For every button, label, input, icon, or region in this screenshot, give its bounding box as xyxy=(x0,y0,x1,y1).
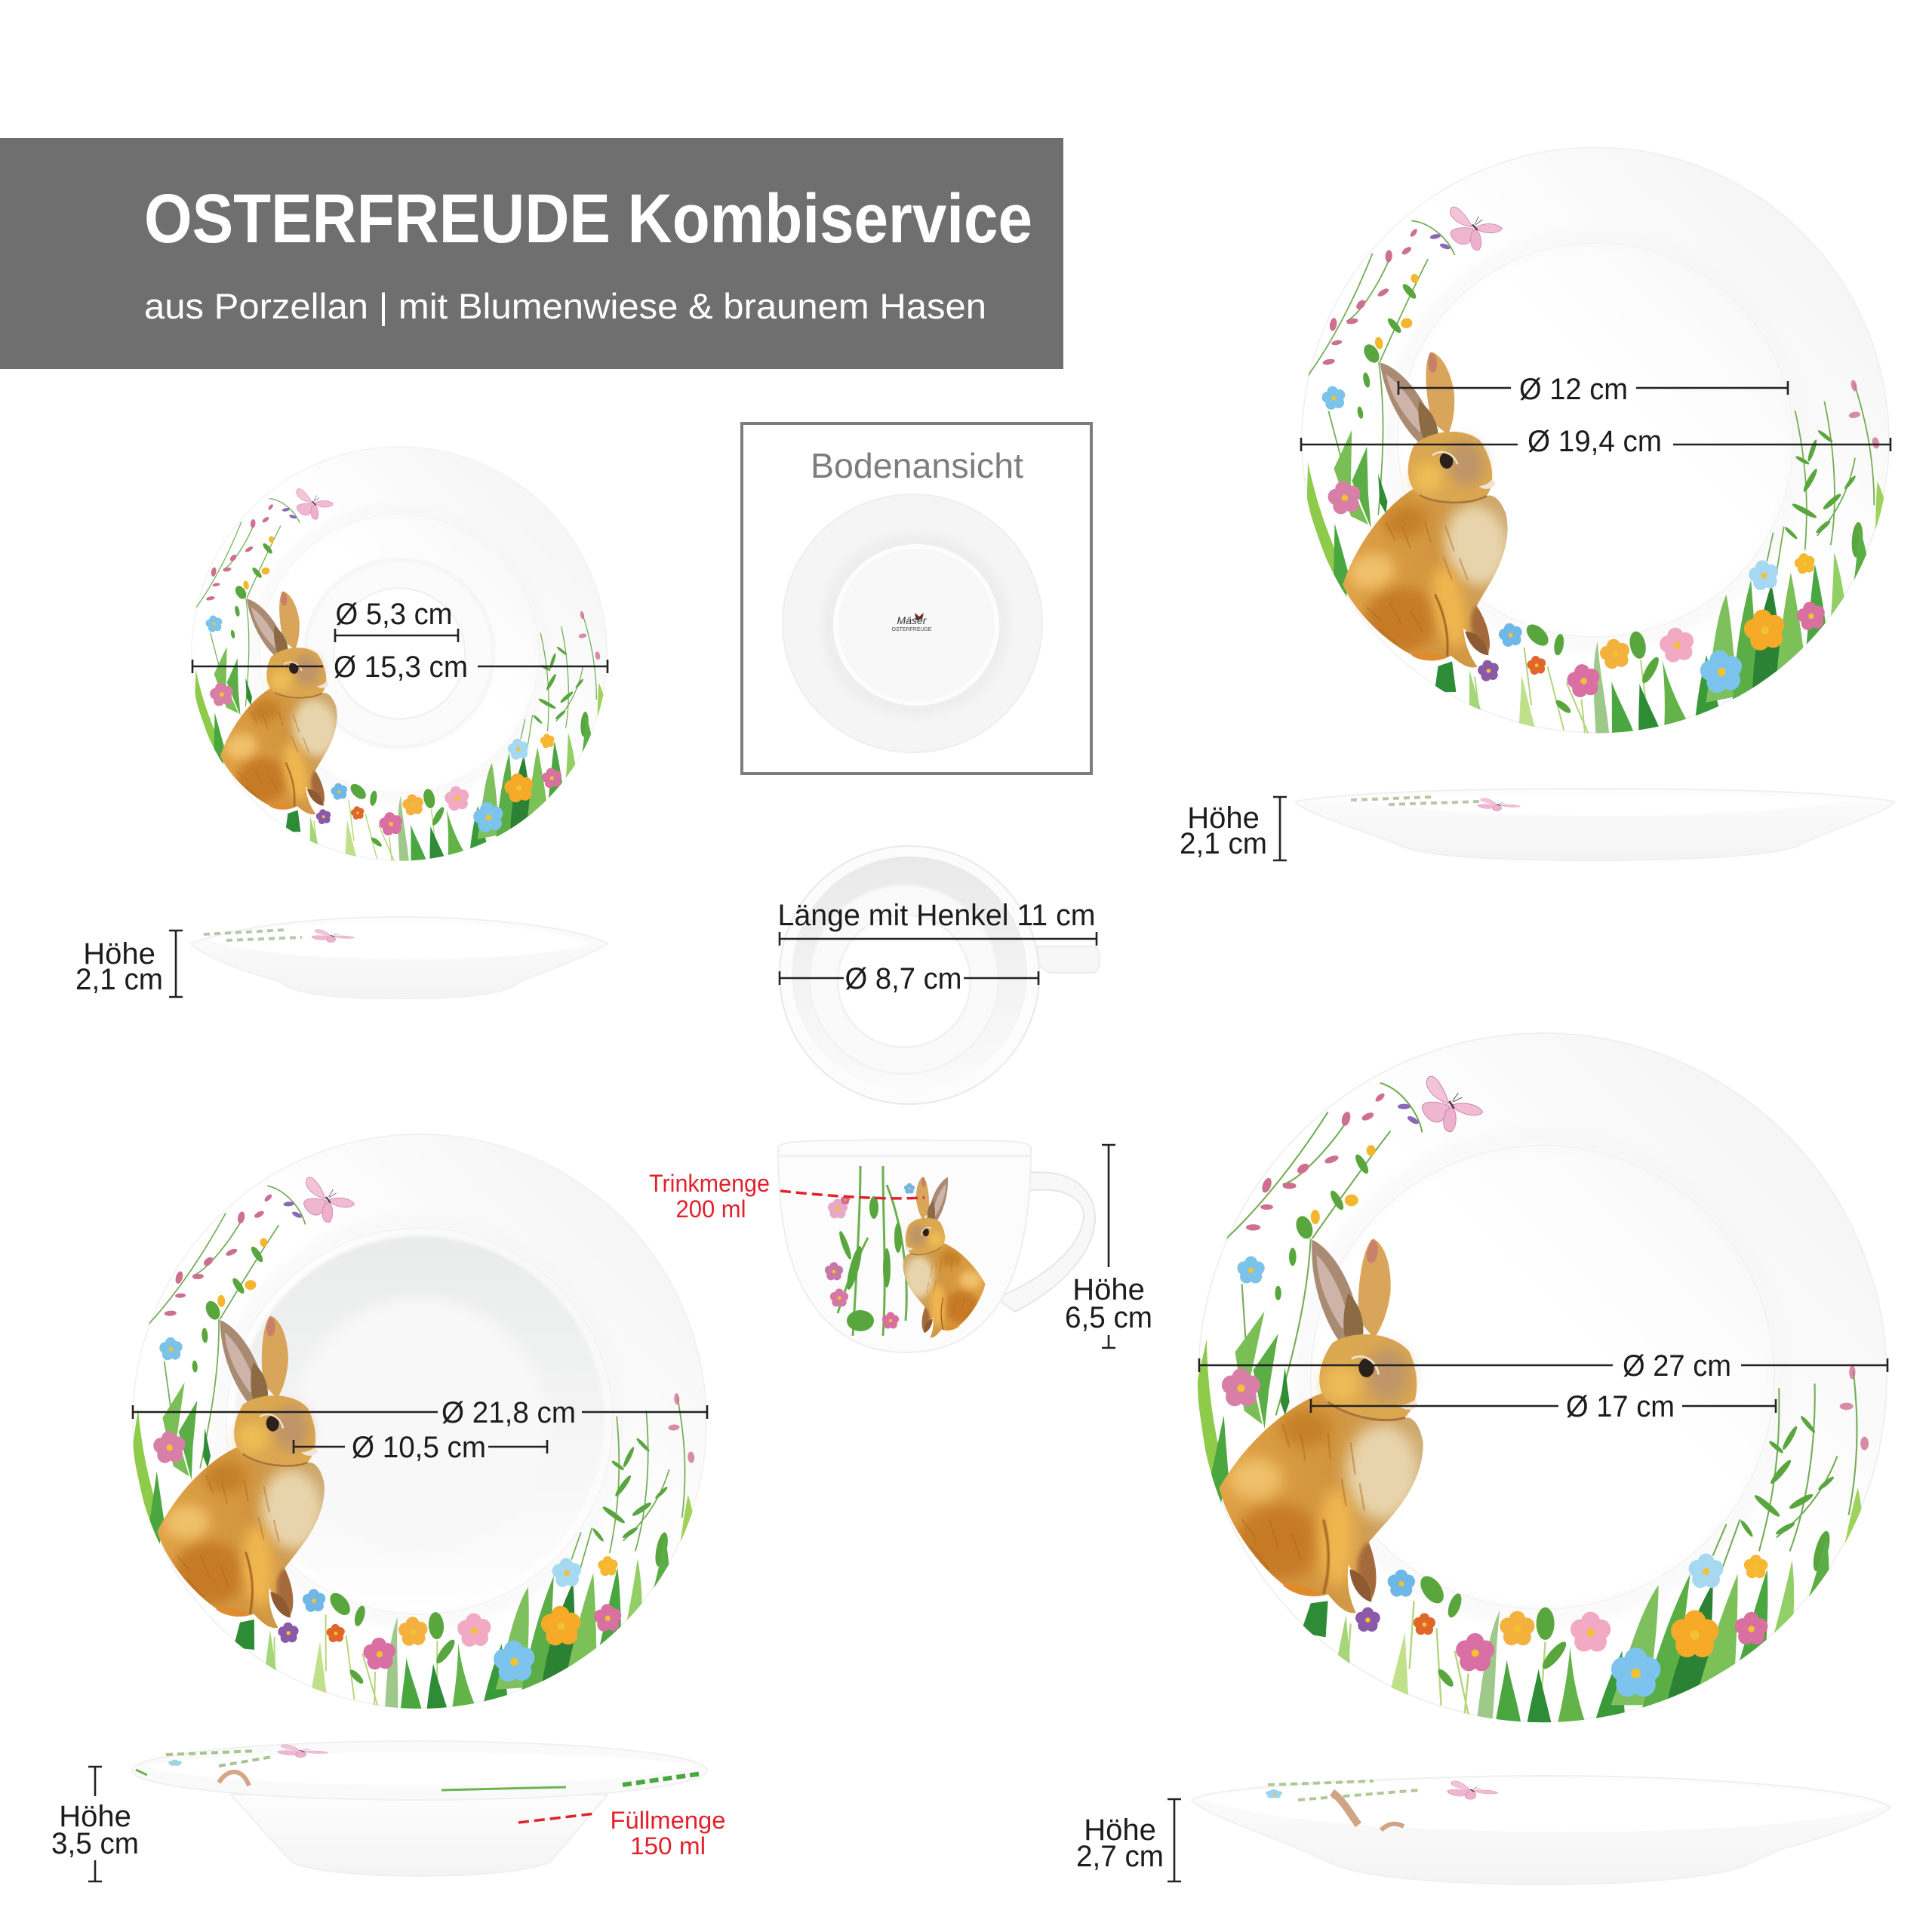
dimension: large plate 27 cm: Ø 27 cm xyxy=(1623,1349,1731,1383)
dimension: large plate height xyxy=(1076,1799,1181,1881)
cup top view xyxy=(780,846,1100,1104)
panel: large dinner plate top view xyxy=(1197,1033,1887,1737)
maker's mark: Mäser xyxy=(897,614,928,626)
dimension: large plate height: 2,7 cm xyxy=(1076,1840,1164,1873)
maker's mark xyxy=(892,613,932,632)
dimension: large plate 17 cm xyxy=(1311,1390,1776,1423)
title banner xyxy=(0,138,1063,369)
dimension: cup length with handle: Länge mit Henkel 11 cm xyxy=(777,899,1096,932)
box heading: Bodenansicht xyxy=(811,446,1023,485)
red fill line: soup plate: 150 ml xyxy=(630,1832,706,1860)
dimension: saucer 15,3 cm xyxy=(192,651,608,684)
dimension: soup plate 21,8 cm xyxy=(133,1396,707,1429)
cup rabbit xyxy=(903,1177,985,1337)
cup flowers xyxy=(825,1166,915,1336)
dimension: cup height xyxy=(1065,1145,1152,1348)
dimension: cup diameter: Ø 8,7 cm xyxy=(845,962,961,995)
title: OSTERFREUDE Kombiservice xyxy=(144,180,1032,257)
maker's mark: OSTERFREUDE xyxy=(892,627,932,632)
dimension: soup plate 10,5 cm: Ø 10,5 cm xyxy=(352,1431,486,1464)
dimension: cup height: 6,5 cm xyxy=(1065,1301,1152,1334)
dimension: cup height: Höhe xyxy=(1072,1273,1145,1306)
large plate side view xyxy=(1192,1776,1890,1884)
cup handle xyxy=(996,1172,1095,1312)
dimension: dinner plate 12 cm xyxy=(1398,373,1788,406)
red fill line: cup: 200 ml xyxy=(676,1195,746,1223)
saucer side view xyxy=(191,917,608,998)
dimension: saucer height xyxy=(75,931,183,997)
dimension: soup plate height: 3,5 cm xyxy=(51,1827,139,1860)
dimension: dinner plate 19,4 cm xyxy=(1301,425,1890,458)
dimension: soup plate height: Höhe xyxy=(59,1800,131,1833)
soup plate side view xyxy=(132,1741,707,1876)
cup side view xyxy=(778,1140,1095,1352)
red fill line: cup xyxy=(649,1170,924,1223)
dimension: dinner plate height: 2,1 cm xyxy=(1180,827,1267,860)
dimension: saucer height: 2,1 cm xyxy=(75,963,163,996)
dimension: large plate 27 cm xyxy=(1199,1349,1887,1383)
red fill line: soup plate: Füllmenge xyxy=(610,1807,726,1834)
dimension: soup plate height xyxy=(51,1767,139,1881)
dimension: saucer height: Höhe xyxy=(83,937,155,971)
dimension: cup diameter xyxy=(780,962,1038,995)
panel: dinner plate top view xyxy=(1301,146,1890,734)
dimension: large plate height: Höhe xyxy=(1084,1814,1156,1847)
dinner plate side view xyxy=(1296,789,1894,860)
dimension: saucer 5,3 cm: Ø 5,3 cm xyxy=(335,598,453,631)
panel: soup plate top view xyxy=(115,1134,712,1740)
subtitle: aus Porzellan | mit Blumenwiese & braunem Hasen xyxy=(144,286,986,326)
dimension: dinner plate height: Höhe xyxy=(1187,801,1260,835)
red fill line: cup: Trinkmenge xyxy=(649,1170,770,1197)
dimension: soup plate 10,5 cm xyxy=(294,1431,547,1464)
cup body xyxy=(778,1140,1031,1352)
red fill line: soup plate xyxy=(518,1807,726,1860)
dimension: saucer 15,3 cm: Ø 15,3 cm xyxy=(334,651,468,684)
dimension: dinner plate 19,4 cm: Ø 19,4 cm xyxy=(1527,425,1662,458)
dimension: dinner plate 12 cm: Ø 12 cm xyxy=(1519,373,1628,406)
panel: Bodenansicht box xyxy=(742,423,1091,774)
dimension: soup plate 21,8 cm: Ø 21,8 cm xyxy=(441,1396,576,1429)
dimension: dinner plate height xyxy=(1180,797,1287,860)
saucer underside xyxy=(783,494,1042,752)
dimension: large plate 17 cm: Ø 17 cm xyxy=(1566,1390,1675,1423)
panel: saucer top view xyxy=(191,447,608,861)
